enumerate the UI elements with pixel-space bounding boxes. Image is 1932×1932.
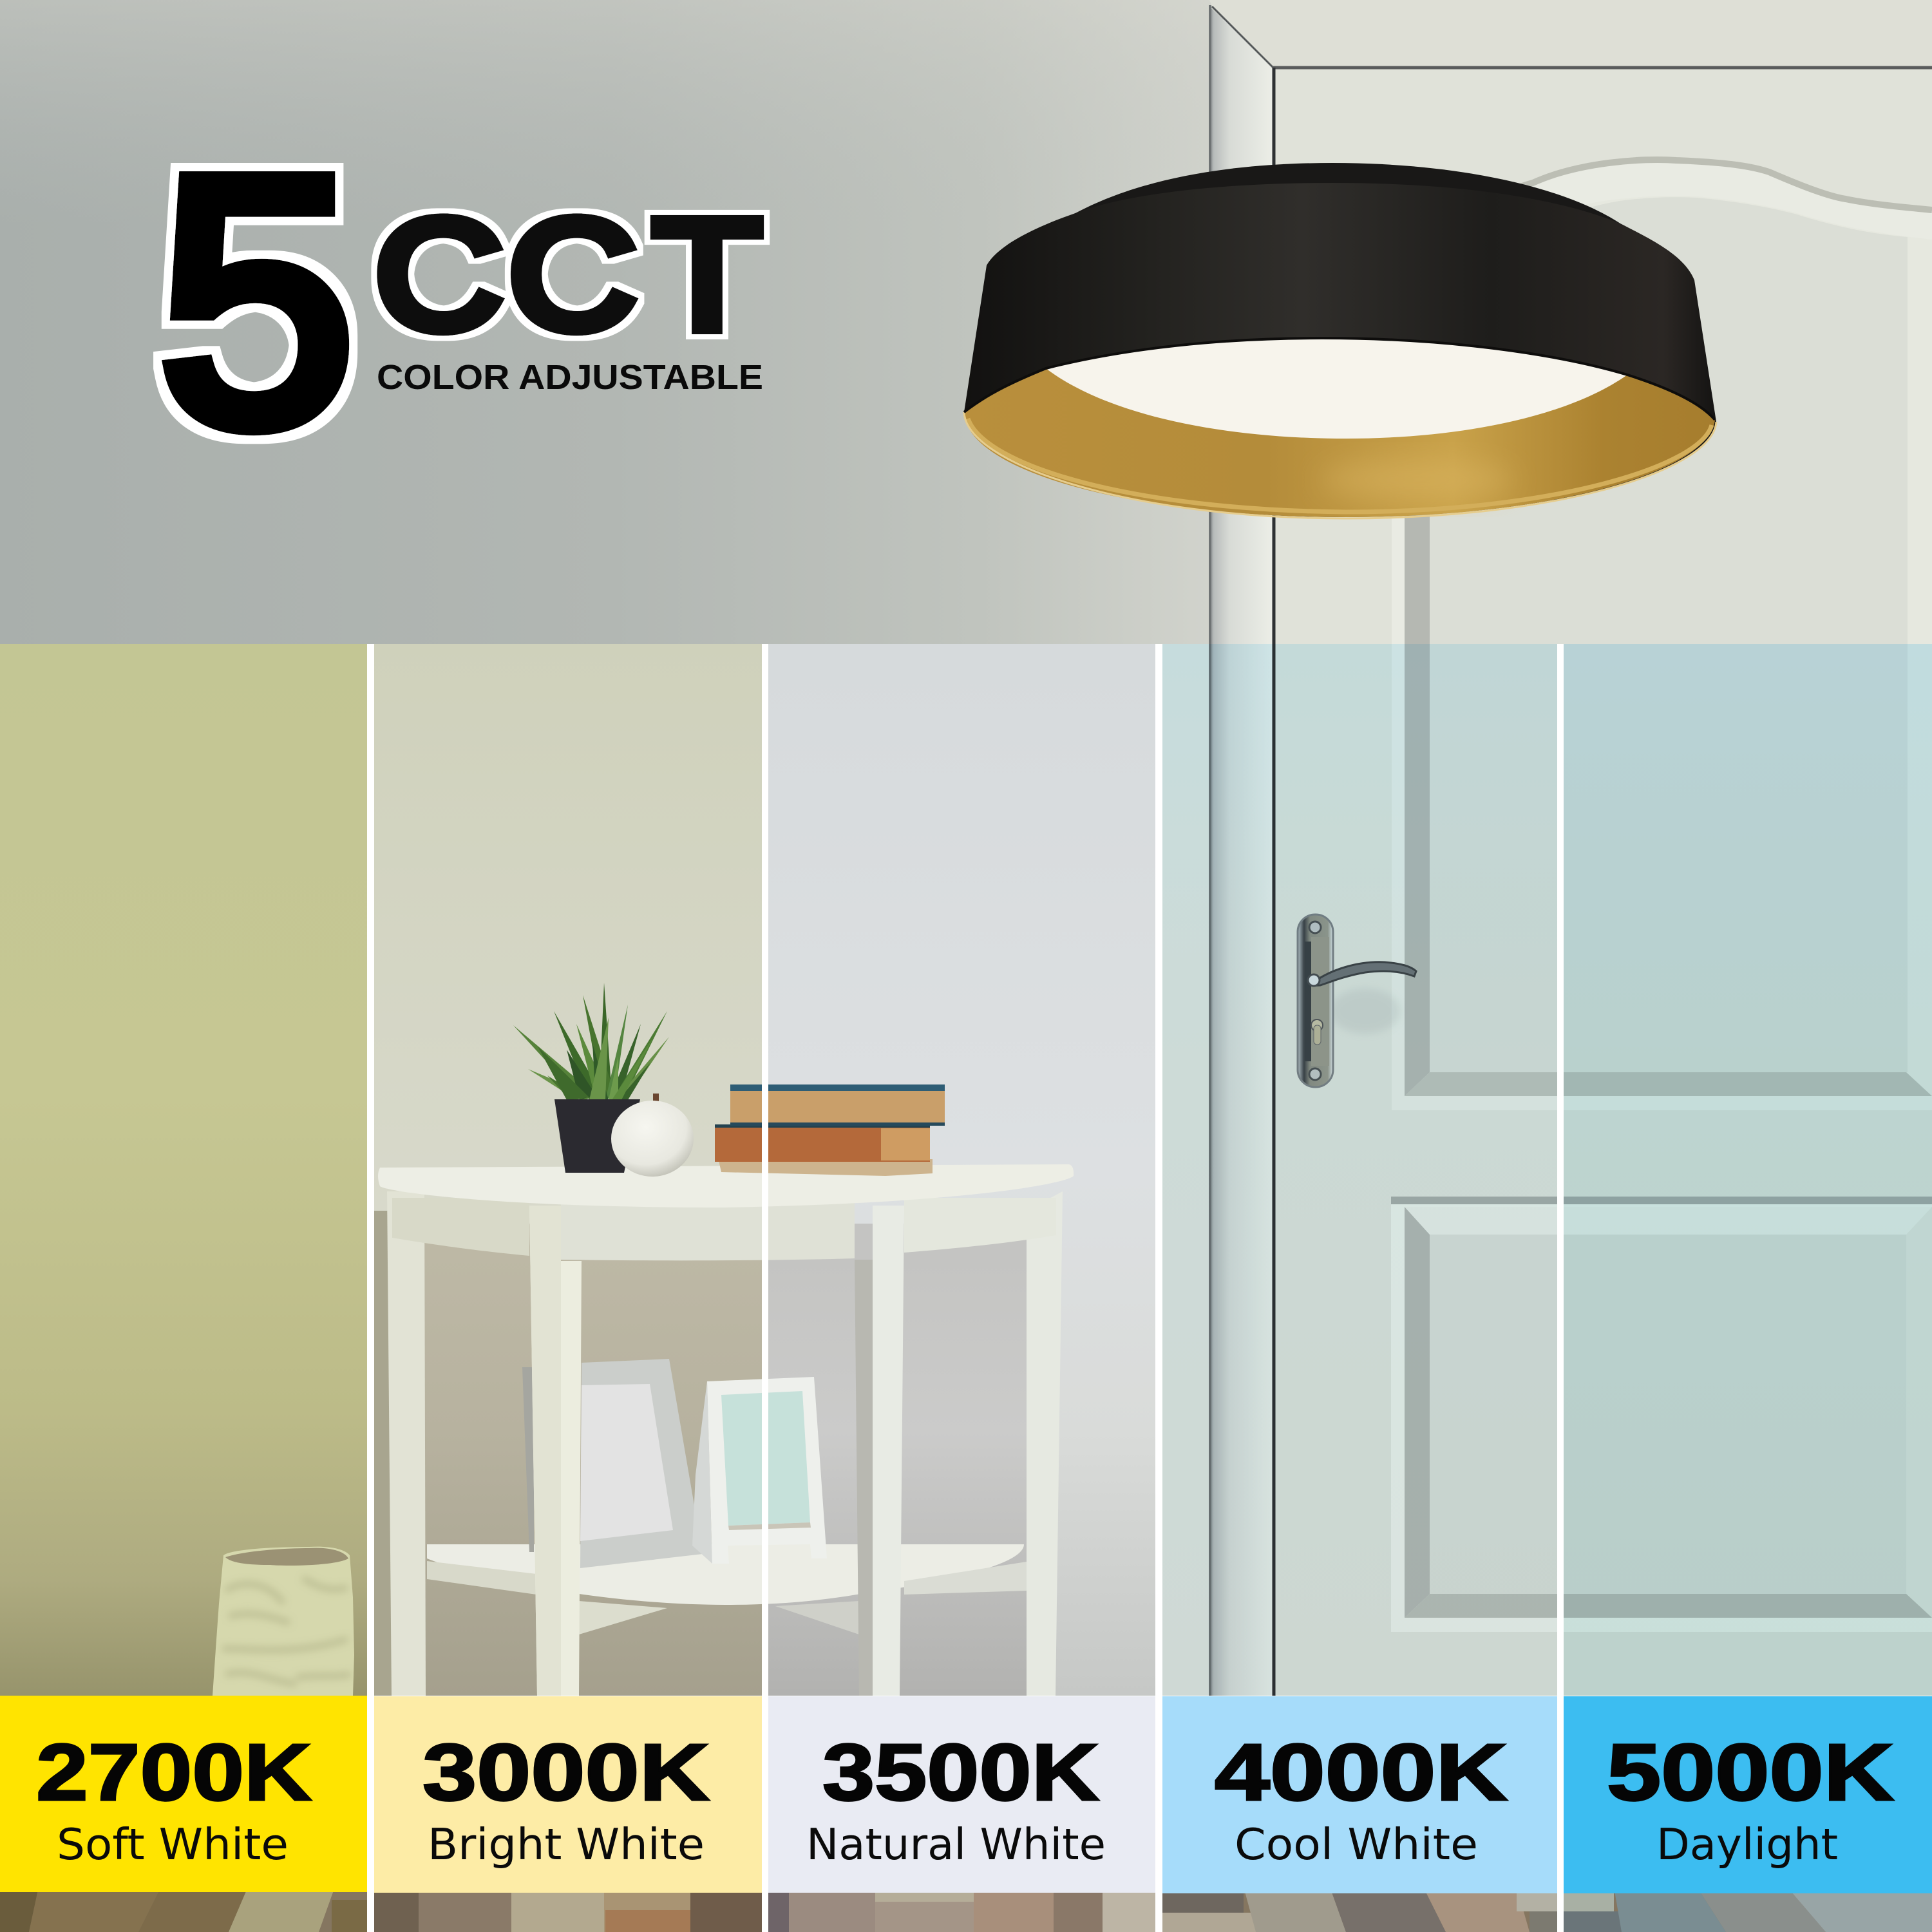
colour bar: 3500K: [768, 1696, 1155, 1893]
door frame side: [1211, 8, 1273, 1696]
lower wall colour columns: [0, 644, 1214, 1696]
stack of books: [715, 1084, 945, 1176]
colour bar: 5000K: Daylight: [1656, 1819, 1838, 1870]
door frame and door: [1209, 0, 1932, 1696]
colour bar: 2700K: [0, 1696, 367, 1892]
ceiling lamp: [964, 163, 1716, 518]
big number 5: 5: [159, 106, 354, 497]
door slab: [1274, 68, 1932, 1696]
column dividers: [367, 644, 1564, 1932]
white picture frame: [692, 1377, 827, 1564]
lamp shade: [964, 183, 1716, 517]
column 5 daylight tint: [1564, 644, 1932, 1696]
door frame top: [1209, 0, 1932, 68]
top book: [730, 1084, 945, 1126]
white diffuser: [1046, 338, 1627, 439]
CCT heading: CCT: [375, 189, 761, 361]
colour bar: 3000K: Bright White: [428, 1819, 705, 1870]
colour bar: 3500K: Natural White: [806, 1819, 1106, 1870]
ceramic apple: [611, 1094, 694, 1177]
bottom book: [718, 1158, 933, 1176]
colour bar: 4000K: [1162, 1696, 1557, 1893]
middle book: [715, 1124, 930, 1162]
colour bar: 2700K: Soft White: [57, 1819, 289, 1870]
colour bar: 3000K: [374, 1696, 762, 1893]
console table: [378, 1164, 1074, 1696]
column 4 cool tint: [1162, 644, 1557, 1696]
front table leg left: [529, 1206, 582, 1696]
potted plant: [513, 983, 669, 1173]
colour bar: 3000K: 3000K: [422, 1728, 710, 1817]
colour bar: 4000K: Cool White: [1235, 1819, 1478, 1870]
upper wall background: [0, 0, 1224, 644]
upper door panel: [1392, 160, 1932, 1110]
table shelf: [427, 1544, 1024, 1605]
table top: [378, 1164, 1074, 1208]
front table leg right: [855, 1206, 904, 1696]
table apron: [392, 1188, 1056, 1260]
silver picture frame: [522, 1359, 703, 1568]
ceramic vase: [213, 1547, 354, 1696]
rear table legs: [387, 1191, 426, 1696]
COLOR ADJUSTABLE subheading: COLOR ADJUSTABLE: [377, 358, 763, 397]
colour bar: 3500K: 3500K: [822, 1728, 1099, 1817]
door handle: [1298, 914, 1416, 1087]
gold interior: [964, 338, 1715, 517]
colour bar: 5000K: [1564, 1696, 1932, 1893]
colour bar: 5000K: 5000K: [1607, 1728, 1894, 1817]
wood floor strip: [0, 1887, 1932, 1932]
lower door panel: [1391, 1197, 1932, 1632]
colour bar: 4000K: 4000K: [1215, 1728, 1508, 1817]
plant leaves: [513, 983, 669, 1101]
colour bar: 2700K: 2700K: [36, 1728, 312, 1817]
lamp canopy: [1070, 163, 1620, 258]
logo: 5 CCT colour adjustable: [159, 106, 763, 497]
plant pot: [554, 1099, 640, 1173]
